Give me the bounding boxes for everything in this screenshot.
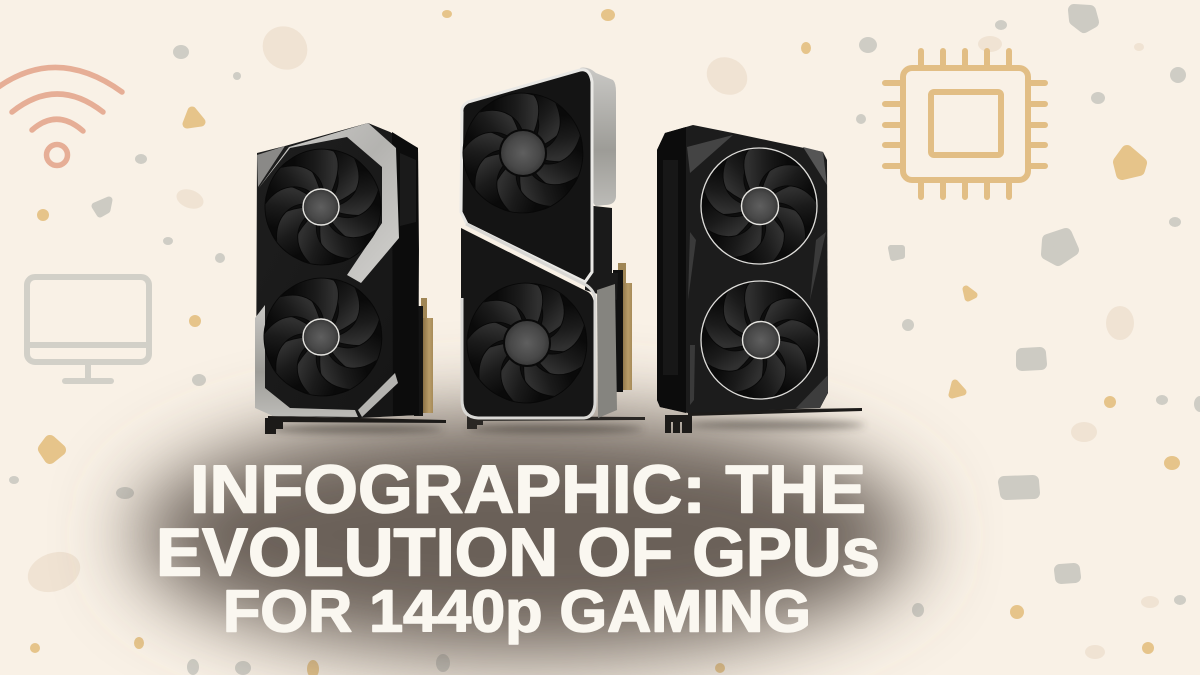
icon: chip <box>885 51 1045 197</box>
card shadow <box>267 425 443 433</box>
bracket <box>467 416 645 429</box>
fan: top <box>449 78 596 225</box>
title <box>156 452 880 644</box>
card shadow <box>685 421 865 429</box>
fan: bottom <box>453 268 600 415</box>
pcie connector <box>613 263 632 392</box>
icon: monitor <box>27 277 149 381</box>
silver top frame <box>258 123 399 283</box>
title line 1: INFOGRAPHIC: THE <box>190 452 866 528</box>
lower silver edge <box>462 224 595 418</box>
fan: top <box>688 134 831 275</box>
upper panel <box>461 70 592 282</box>
pcie connector <box>414 298 433 416</box>
title line 2: EVOLUTION OF GPUs <box>156 514 880 590</box>
lower right silver <box>597 284 617 418</box>
grey corner <box>257 146 285 187</box>
icon: wifi <box>0 67 122 166</box>
bracket <box>265 416 446 434</box>
title backdrop shadow <box>135 415 915 655</box>
card shadow <box>467 425 643 433</box>
grey facets <box>687 135 828 408</box>
lower panel <box>461 228 594 417</box>
title line 3: FOR 1440p GAMING <box>223 578 811 644</box>
fan: bottom <box>250 263 395 407</box>
bracket <box>665 408 862 433</box>
card body <box>657 125 828 413</box>
silver lower left <box>255 305 358 417</box>
card body <box>256 123 419 418</box>
fan: top <box>251 135 394 276</box>
gpu: left silver card <box>250 123 446 434</box>
gpu: right black card <box>657 125 865 433</box>
silver right top <box>580 68 616 206</box>
fins <box>585 205 618 300</box>
fan: bottom <box>688 266 833 410</box>
gpu: center founders card <box>449 68 645 433</box>
side panel <box>392 132 419 416</box>
silver lower right <box>358 373 398 417</box>
side panel <box>657 127 686 413</box>
